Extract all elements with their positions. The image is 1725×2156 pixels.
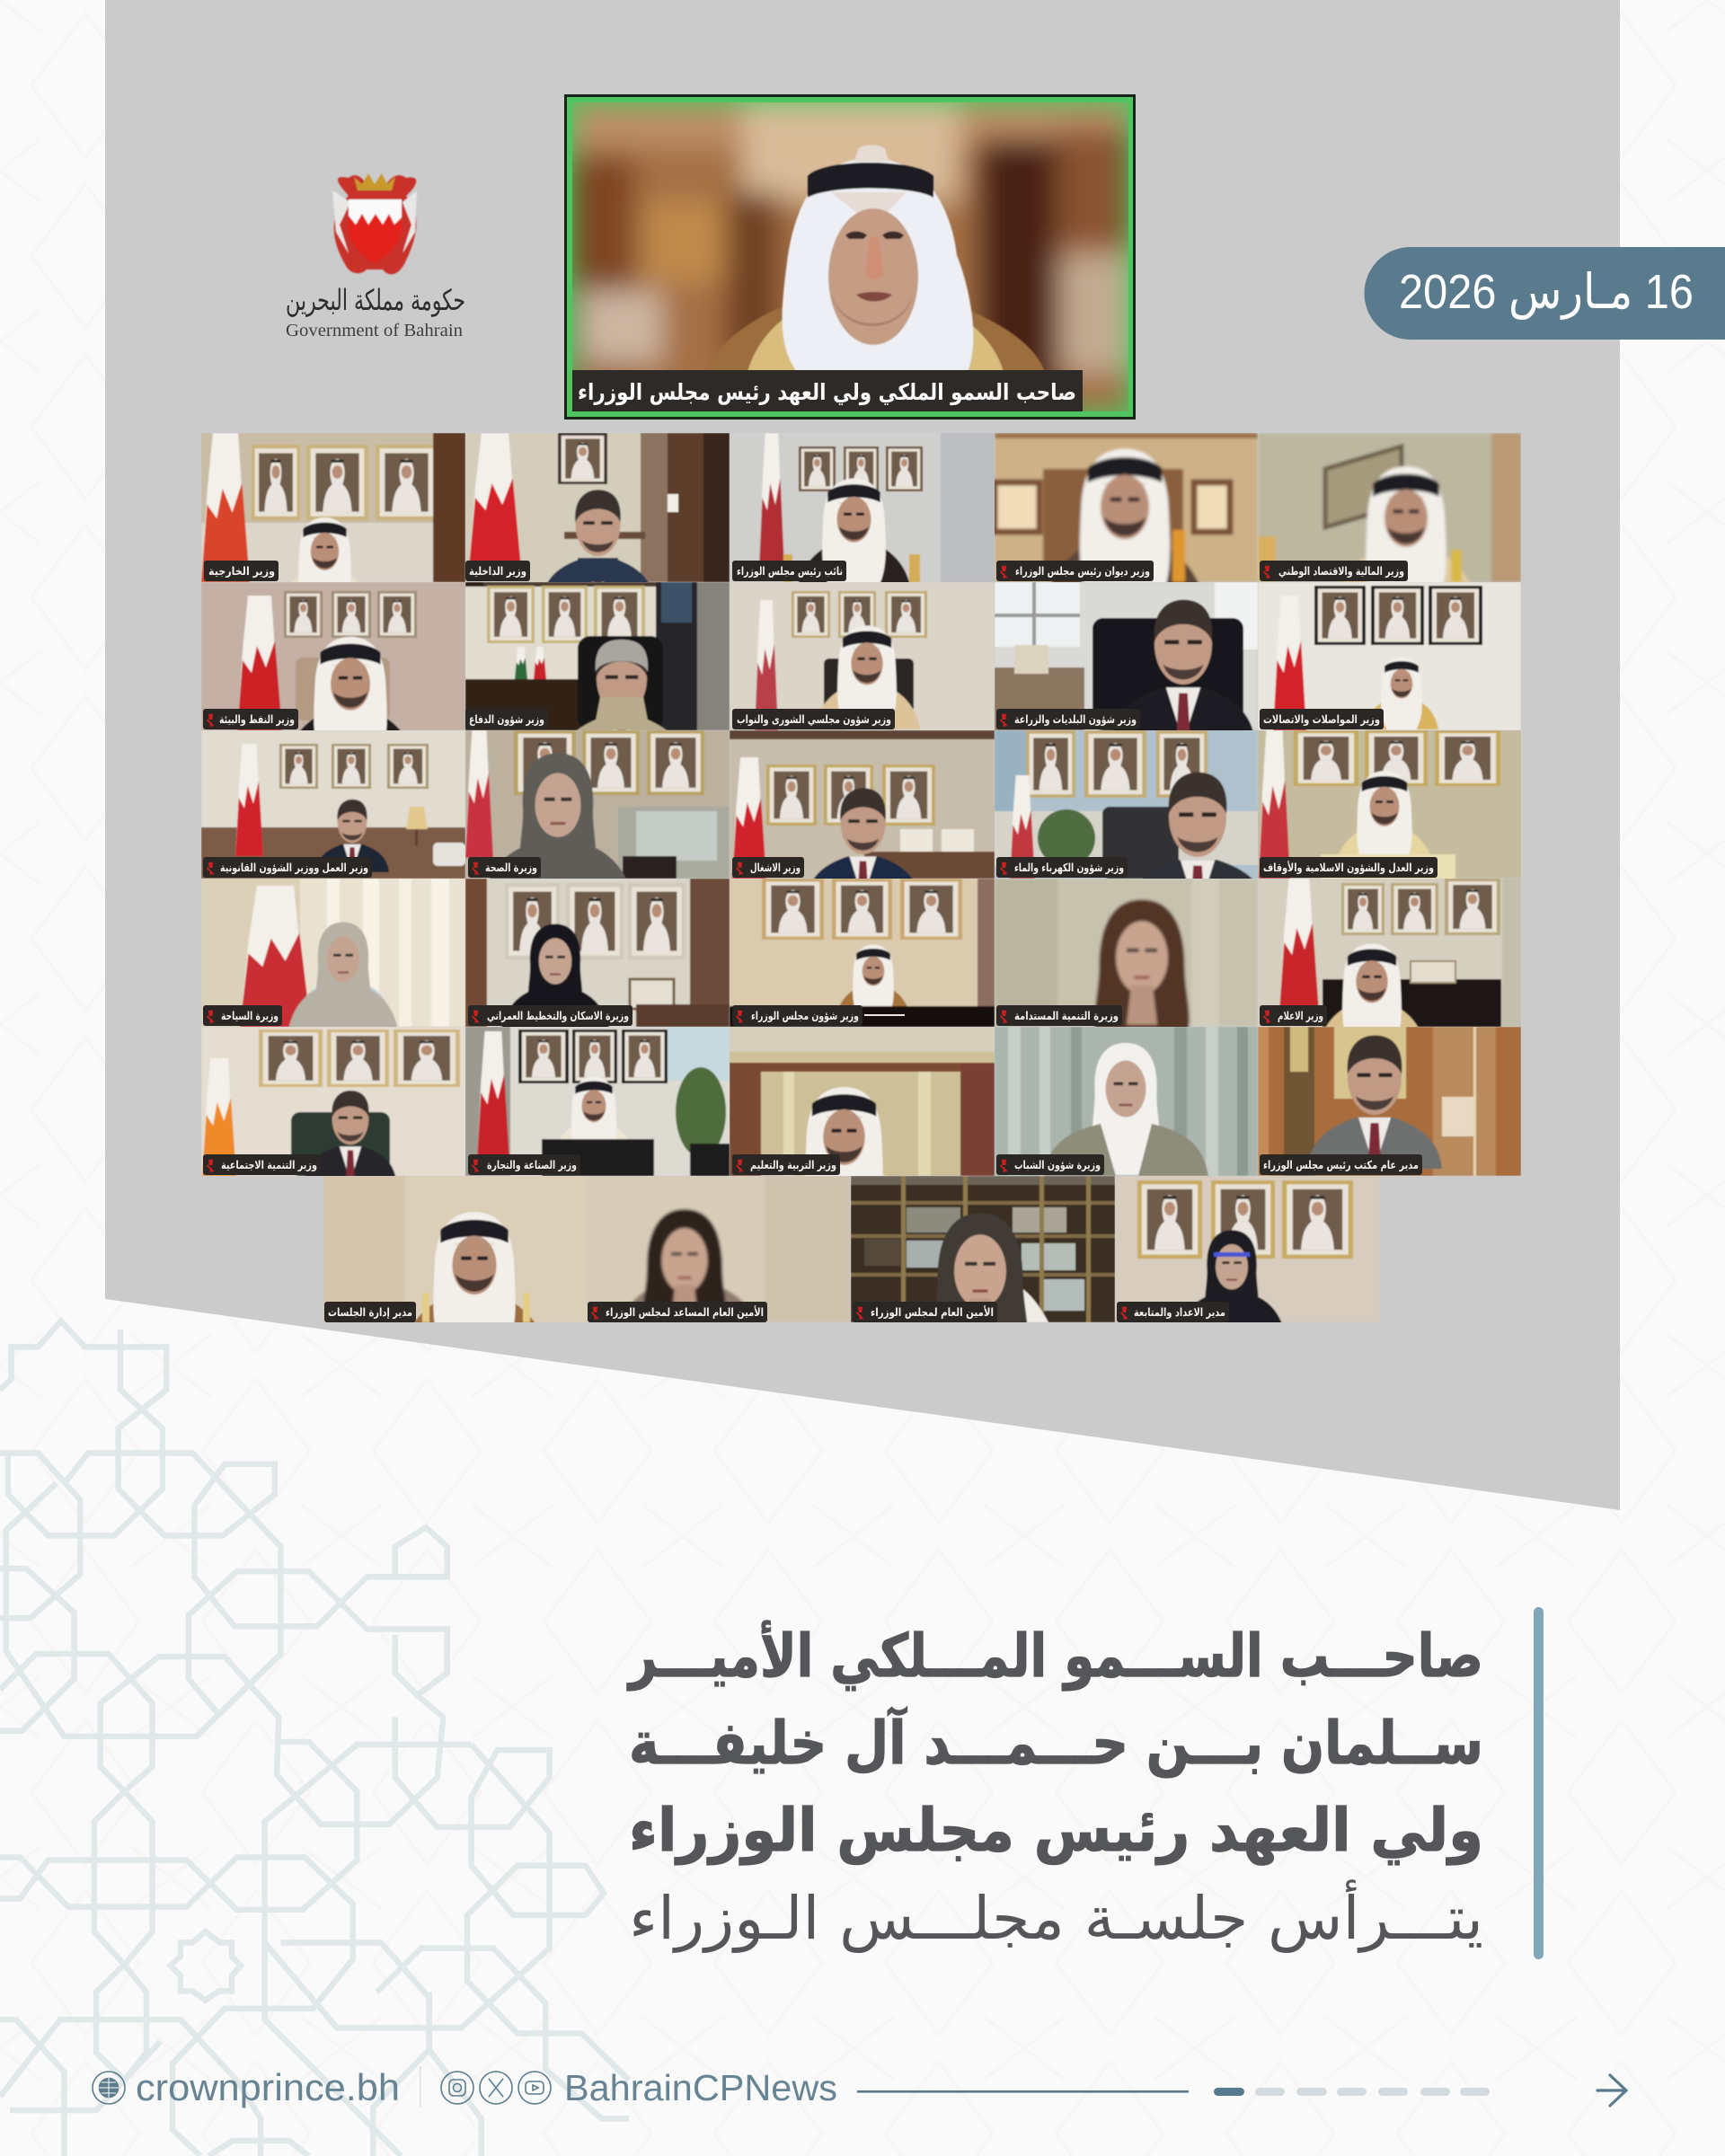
label — [996, 1005, 1122, 1026]
logo Arabic wordmark: حكومة مملكة البحرين — [286, 283, 465, 317]
label: الأمين العام المساعد لمجلس الوزراء — [606, 1305, 764, 1320]
label: وزير الاشغال — [750, 861, 801, 874]
tile: Deputy Prime Minister — [732, 433, 995, 582]
label: وزير شؤون مجلسي الشورى والنواب — [737, 712, 891, 726]
tile: Minister of Cabinet Affairs — [730, 879, 995, 1027]
label — [1260, 1005, 1327, 1026]
tile: Minister of Works — [730, 730, 995, 879]
label: وزيرة السياحة — [221, 1009, 279, 1022]
label — [732, 561, 846, 581]
tile: Minister of Foreign Affairs — [201, 433, 465, 582]
tile: Minister of Health — [465, 730, 730, 879]
label — [732, 1154, 840, 1175]
tile: Minister of Housing and Urban Planning — [465, 879, 730, 1027]
headline line 2: ســلمان بـــن حـــمـــد آل خليفـــة — [629, 1706, 1483, 1778]
tile: Minister of Transportation and Telecommunications — [1258, 582, 1521, 730]
label: وزير ديوان رئيس مجلس الوزراء — [1015, 564, 1150, 578]
tile: Minister of Sustainable Development — [995, 879, 1258, 1027]
label: مدير الاعداد والمتابعة — [1134, 1305, 1225, 1319]
label: وزير الصناعة والتجارة — [487, 1158, 577, 1171]
label — [465, 709, 548, 729]
label: وزير الخارجية — [208, 564, 275, 578]
label — [468, 1154, 580, 1175]
label: وزير الداخلية — [469, 564, 526, 578]
tile: Minister of Industry and Commerce — [465, 1027, 730, 1176]
date pill — [1364, 247, 1725, 340]
main video name label: صاحب السمو الملكي ولي العهد رئيس مجلس الوزراء — [578, 379, 1076, 406]
label — [996, 857, 1128, 878]
tile: Minister of Oil and Environment — [201, 582, 465, 730]
label: وزير شؤون الكهرباء والماء — [1014, 861, 1124, 874]
label: وزيرة شؤون الشباب — [1014, 1158, 1101, 1171]
label: وزير العدل والشؤون الاسلامية والأوقاف — [1263, 861, 1434, 874]
label — [996, 561, 1154, 581]
icon: coat of arms — [332, 173, 417, 274]
tile: Minister of Electricity and Water — [995, 730, 1258, 879]
tile: Minister of Prime Minister's Court — [995, 433, 1258, 582]
headline line 3: ولي العهد رئيس مجلس الوزراء — [629, 1796, 1483, 1866]
tile: Minister of Tourism — [201, 879, 465, 1027]
main video: Crown Prince tile — [564, 94, 1136, 420]
label: وزير النفط والبيئة — [219, 712, 295, 726]
label — [468, 1005, 632, 1026]
footer — [93, 2066, 1626, 2108]
icon: X — [480, 2072, 512, 2104]
tile: Minister of Shura and Representatives Affairs — [730, 582, 995, 730]
label — [324, 1302, 416, 1322]
label — [203, 857, 372, 878]
label: وزيرة التنمية المستدامة — [1014, 1009, 1119, 1022]
headline — [627, 1620, 1483, 1953]
blurred office background — [572, 102, 1128, 411]
logo English wordmark: Government of Bahrain — [286, 321, 463, 340]
date text: 16 مـارس 2026 — [1399, 265, 1694, 320]
tile: Minister of Education — [730, 1027, 995, 1176]
headline line 1: صاحـــب الســـمو المـــلكي الأميـــر — [627, 1620, 1483, 1692]
label — [853, 1302, 997, 1322]
label — [1117, 1302, 1229, 1322]
label — [588, 1302, 767, 1322]
label — [204, 561, 279, 581]
accent bar — [1534, 1607, 1544, 1959]
person: Crown Prince — [707, 146, 1045, 372]
grey panel — [105, 0, 1620, 1510]
tile: Minister of Municipalities and Agriculture — [995, 582, 1258, 730]
label: وزير شؤون مجلس الوزراء — [751, 1009, 859, 1022]
label: وزير المالية والاقتصاد الوطني — [1278, 564, 1404, 578]
label — [732, 857, 804, 878]
logo: Government of Bahrain — [286, 173, 465, 340]
label — [996, 709, 1140, 729]
geometric arabesque pattern — [0, 1321, 629, 2156]
label: وزيرة الاسكان والتخطيط العمراني — [487, 1009, 629, 1022]
label: وزير الاعلام — [1278, 1009, 1323, 1023]
label — [465, 561, 530, 581]
tile: Minister of Justice, Islamic Affairs and Endowments — [1258, 730, 1521, 879]
label — [468, 857, 541, 878]
rule — [857, 2090, 1189, 2093]
tile: Minister of Labour and Legal Affairs — [201, 730, 465, 879]
label: مدير إدارة الجلسات — [328, 1305, 412, 1319]
tile: Minister of Youth Affairs — [995, 1027, 1258, 1176]
tile: Director of Sessions Management — [323, 1176, 586, 1322]
headline line 4: يتـــرأس جلسـة مجلـــس الـوزراء — [629, 1879, 1483, 1953]
tile: Director of Preparation and Follow-up — [1115, 1176, 1380, 1322]
label — [1260, 1154, 1422, 1175]
label: وزير التربية والتعليم — [750, 1158, 836, 1171]
label: وزير التنمية الاجتماعية — [221, 1158, 317, 1171]
tile: Minister of Social Development — [201, 1027, 465, 1176]
label — [203, 709, 298, 729]
website text: crownprince.bh — [136, 2066, 400, 2108]
label — [732, 709, 895, 729]
label — [1260, 857, 1438, 878]
label — [1260, 561, 1408, 581]
label — [203, 1005, 282, 1026]
label: وزيرة الصحة — [485, 861, 537, 874]
tile: Minister of Defence Affairs — [465, 582, 730, 730]
tile: Minister of Interior — [465, 433, 730, 582]
label: الأمين العام لمجلس الوزراء — [871, 1305, 994, 1320]
label: وزير شؤون الدفاع — [469, 712, 544, 726]
icon: next arrow — [1597, 2075, 1626, 2106]
label — [203, 1154, 321, 1175]
label — [1260, 709, 1384, 729]
social handle text: BahrainCPNews — [564, 2067, 837, 2108]
tile: Minister of Finance and National Economy — [1258, 433, 1521, 582]
tile: Minister of Information — [1258, 879, 1521, 1027]
label: وزير شؤون البلديات والزراعة — [1014, 712, 1137, 726]
icon: instagram — [441, 2072, 473, 2104]
icon: globe — [93, 2072, 125, 2104]
label — [732, 1005, 905, 1026]
main video name label — [572, 370, 1083, 411]
label: وزير المواصلات والاتصالات — [1263, 712, 1380, 726]
tile: Assistant Secretary-General of the Cabinet — [587, 1176, 851, 1322]
page indicator dots — [1214, 2088, 1490, 2096]
icon: youtube — [518, 2072, 551, 2104]
label — [996, 1154, 1104, 1175]
tile: Secretary-General of the Cabinet — [851, 1176, 1115, 1322]
label: مدير عام مكتب رئيس مجلس الوزراء — [1263, 1158, 1419, 1172]
tile: Director General of Prime Minister's Office — [1258, 1027, 1521, 1176]
label: وزير العمل ووزير الشؤون القانونية — [220, 861, 368, 874]
label: نائب رئيس مجلس الوزراء — [737, 564, 843, 578]
